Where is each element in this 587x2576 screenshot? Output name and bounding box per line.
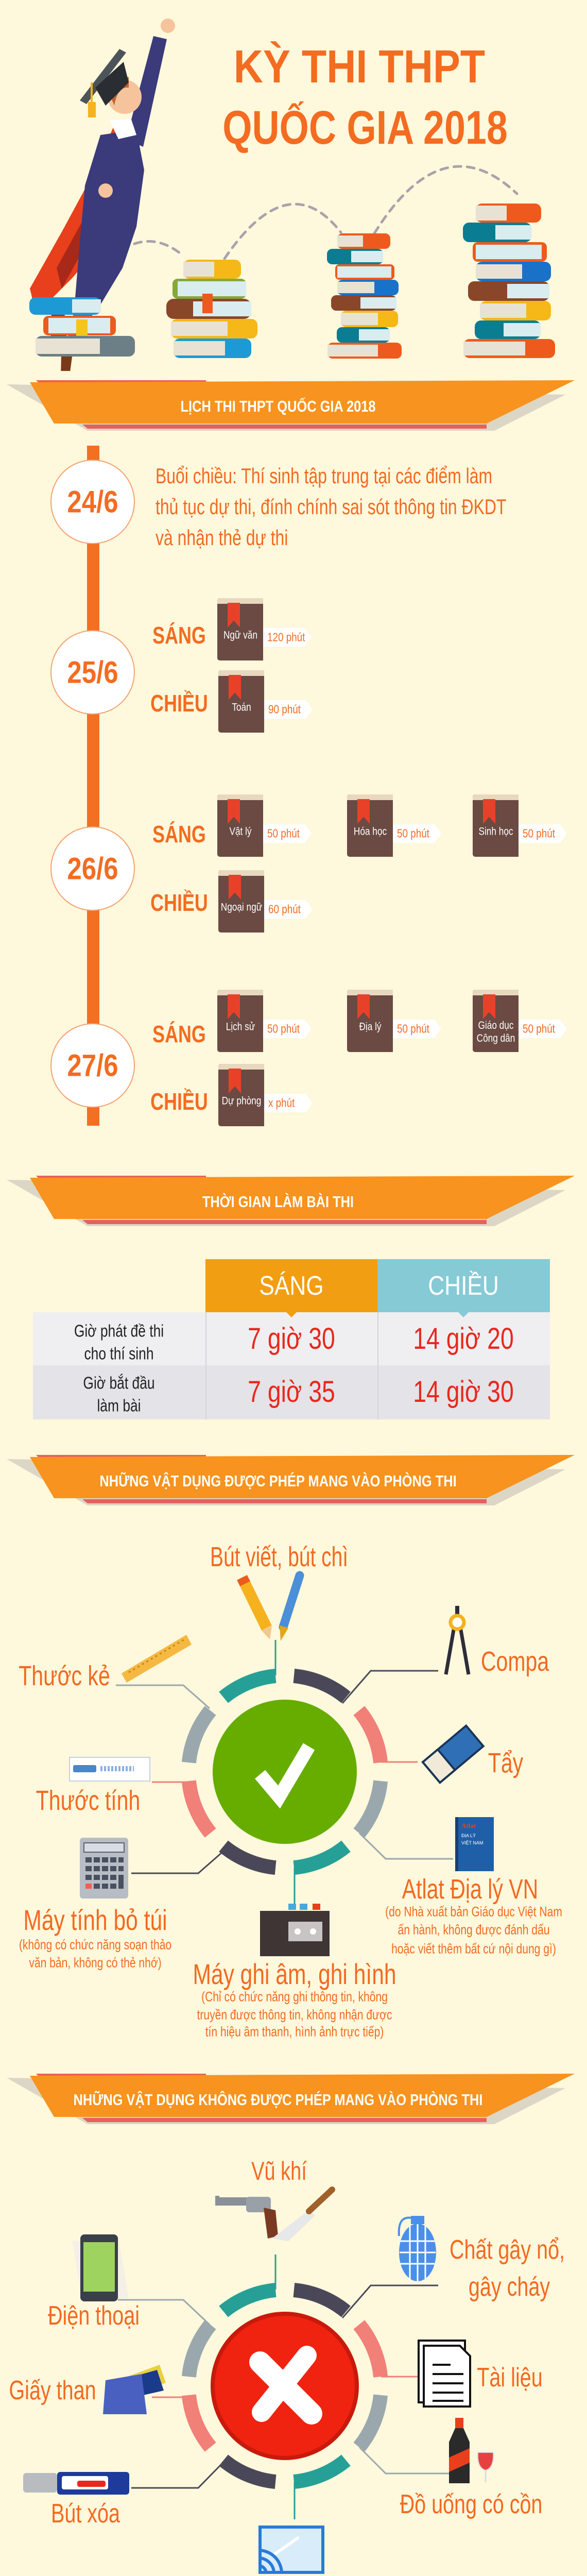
subject: ngữ văn: Ngữ văn: [223, 629, 257, 641]
label: sáng 25/6: SÁNG: [152, 622, 206, 649]
label: atlat: (do Nhà xuất bản Giáo dục Việt Nam: [385, 1904, 562, 1920]
header illustration: student and book stacks: [29, 19, 555, 371]
header: chiều: CHIỀU: [428, 1271, 499, 1301]
header: sáng: SÁNG: [259, 1271, 324, 1301]
label: thước tính: Thước tính: [36, 1785, 140, 1816]
label: sáng 27/6: SÁNG: [152, 1021, 206, 1047]
ring segments: [189, 1676, 381, 1868]
subject: ngữ văn: 120 phút: [267, 631, 305, 644]
label: đồ uống có cồn: Đồ uống có cồn: [400, 2489, 542, 2519]
title: QUỐC GIA 2018: [222, 101, 508, 154]
subject: giáo dục công dân: 50 phút: [523, 1022, 555, 1036]
connector lines: [118, 2255, 453, 2519]
header: sáng: [205, 1259, 377, 1312]
date 25/6: [50, 630, 135, 715]
label: chất gây nổ: [450, 2235, 565, 2302]
label: máy tính bỏ túi: Máy tính bỏ túi: [23, 1904, 167, 1936]
icon: carbon paper: [103, 2365, 166, 2414]
icon: bottle and glass: [449, 2418, 493, 2483]
banner: thời gian làm bài: THỜI GIAN LÀM BÀI THI: [202, 1193, 354, 1211]
row 2: Giờ bắt đầu: [83, 1374, 155, 1392]
label: máy tính bỏ túi: (không có chức năng soạn thảo: [19, 1937, 171, 1953]
ring segments: [189, 2290, 381, 2482]
date 25/6: 25/6: [67, 655, 118, 689]
icon: atlas book: ĐỊA LÝ: [461, 1833, 476, 1838]
date 24/6: [50, 460, 135, 544]
row 1: Giờ phát đề thi: [74, 1321, 164, 1341]
subject: giáo dục công dân: Giáo dục: [478, 1020, 513, 1031]
icon: atlas book: [455, 1817, 494, 1871]
icon: slide rule calculator: [70, 1757, 150, 1781]
banner: allowed items: NHỮNG VẬT DỤNG ĐƯỢC PHÉP MANG VÀO PHÒNG THI: [99, 1472, 457, 1490]
label: atlat: Atlat Địa lý VN: [402, 1874, 538, 1905]
label: chất gây nổ: Chất gây nổ,: [450, 2235, 565, 2265]
row 1: 14 giờ 20: [413, 1322, 514, 1355]
label: máy ghi âm: tín hiệu âm thanh, hình ảnh trực tiếp): [205, 2024, 384, 2039]
row 2: 7 giờ 35: [248, 1375, 335, 1409]
label: máy ghi âm: Máy ghi âm, ghi hình: [193, 1958, 396, 1990]
label: bút xóa: Bút xóa: [51, 2499, 120, 2529]
label: vũ khí: Vũ khí: [251, 2157, 307, 2185]
subject: vật lý: 50 phút: [267, 826, 300, 840]
subject: địa lý: Địa lý: [359, 1021, 381, 1032]
icon: calculator: [80, 1838, 128, 1899]
red X circle: [213, 2314, 357, 2458]
date 27/6: 27/6: [67, 1048, 118, 1083]
label: chiều 25/6: CHIỀU: [150, 690, 208, 717]
label: bút viết, bút chì: Bút viết, bút chì: [210, 1541, 348, 1572]
label: atlat: [385, 1874, 562, 1957]
title: [222, 41, 508, 154]
icon: compass: [446, 1606, 469, 1674]
icon: ruler: [122, 1635, 192, 1683]
banner: allowed items: [7, 1455, 575, 1505]
label: máy ghi âm: [193, 1958, 396, 2039]
subject: hóa học: Hóa học: [353, 825, 387, 837]
date 26/6: 26/6: [67, 851, 118, 886]
text: 24/6 afternoon description: [156, 464, 506, 550]
label: chiều 26/6: CHIỀU: [150, 889, 208, 916]
subject: sinh học: 50 phút: [523, 826, 555, 840]
subject: dự phòng: x phút: [268, 1096, 295, 1110]
book stack 2: [166, 260, 257, 358]
connector lines: [116, 1640, 453, 1904]
subject: ngoại ngữ: 60 phút: [268, 903, 301, 916]
subject: địa lý: [347, 990, 441, 1052]
banner: thời gian làm bài: [7, 1176, 575, 1226]
icon: recorder: [260, 1904, 330, 1956]
subject: ngữ văn: [217, 598, 312, 660]
icon: grenade: [399, 2216, 436, 2281]
icon: pencil and pen: [242, 1575, 300, 1641]
row 1: [33, 1312, 550, 1365]
banner: prohibited items: [7, 2074, 575, 2124]
subject: lịch sử: [217, 990, 312, 1052]
label: máy tính bỏ túi: văn bản, không có thẻ nhớ): [29, 1955, 162, 1970]
date 27/6: [50, 1023, 135, 1108]
label: atlat: ấn hành, không được đánh dấu: [398, 1922, 549, 1937]
book stack 4: [463, 204, 555, 358]
row 2: [33, 1365, 550, 1419]
text: 24/6 afternoon description: và nhận thẻ dự thi: [156, 526, 288, 550]
timeline line: [87, 446, 99, 1126]
subject: hóa học: [347, 794, 441, 857]
icon: documents: [419, 2341, 470, 2406]
book stack 3: [327, 233, 402, 359]
dashed jump arcs: [86, 166, 517, 289]
label: tài liệu: Tài liệu: [477, 2363, 543, 2393]
banner: prohibited items: NHỮNG VẬT DỤNG KHÔNG ĐƯỢC PHÉP MANG VÀO PHÒNG THI: [74, 2091, 482, 2109]
icon: phone: [72, 2234, 129, 2301]
icon: gun and knife: [215, 2190, 332, 2241]
label: atlat: hoặc viết thêm bất cứ nội dung gì): [391, 1941, 556, 1957]
banner: lịch thi: [7, 380, 575, 431]
header: chiều: [377, 1259, 550, 1312]
subject: hóa học: 50 phút: [397, 826, 429, 840]
label: giấy than: Giấy than: [9, 2376, 96, 2405]
label: điện thoại: Điện thoại: [48, 2301, 140, 2331]
book stack 1: [29, 297, 135, 357]
banner: lịch thi: LỊCH THI THPT QUỐC GIA 2018: [181, 397, 375, 415]
green check circle: [213, 1700, 357, 1844]
date 26/6: [50, 826, 135, 911]
label: tẩy: Tẩy: [488, 1748, 523, 1778]
table: exam times: [33, 1259, 550, 1419]
subject: lịch sử: Lịch sử: [226, 1021, 255, 1032]
label: sáng 26/6: SÁNG: [152, 821, 206, 848]
subject: địa lý: 50 phút: [397, 1022, 429, 1036]
student figure: [30, 19, 175, 376]
icon: correction pen: [23, 2472, 129, 2495]
label: chiều 27/6: CHIỀU: [150, 1088, 208, 1115]
subject: lịch sử: 50 phút: [267, 1022, 300, 1036]
subject: giáo dục công dân: Công dân: [476, 1032, 515, 1044]
subject: sinh học: Sinh học: [478, 825, 513, 837]
row 1: cho thí sinh: [84, 1344, 154, 1363]
subject: toán: Toán: [232, 701, 251, 713]
subject: ngoại ngữ: [218, 870, 313, 933]
text: 24/6 afternoon description: Buổi chiều: Thí sinh tập trung tại các điểm làm: [156, 464, 492, 488]
subject: vật lý: [217, 794, 312, 857]
date 24/6: 24/6: [67, 484, 118, 519]
subject: toán: [218, 670, 313, 733]
icon: transmitting device: [258, 2527, 323, 2573]
row 1: 7 giờ 30: [248, 1322, 335, 1355]
label: compa: Compa: [481, 1646, 549, 1677]
label: máy tính bỏ túi: [19, 1904, 171, 1970]
subject: toán: 90 phút: [268, 703, 301, 716]
label: thước kẻ: Thước kẻ: [19, 1660, 110, 1691]
subject: sinh học: [473, 794, 567, 857]
subject: vật lý: Vật lý: [229, 825, 251, 837]
icon: atlas book: Atlat: [461, 1822, 476, 1829]
row 2: 14 giờ 30: [413, 1375, 514, 1409]
icon: atlas book: VIỆT NAM: [461, 1840, 483, 1845]
label: chất gây nổ: gây cháy: [469, 2272, 550, 2302]
label: máy ghi âm: truyền được thông tin, không nhận được: [197, 2007, 392, 2023]
subject: ngoại ngữ: Ngoại ngữ: [220, 901, 262, 913]
subject: dự phòng: Dự phòng: [221, 1095, 261, 1107]
subject: giáo dục công dân: [473, 990, 567, 1052]
label: máy ghi âm: (Chỉ có chức năng ghi thông tin, không: [201, 1989, 388, 2004]
subject: dự phòng: [218, 1064, 313, 1126]
text: 24/6 afternoon description: thủ tục dự thi, đính chính sai sót thông tin ĐKDT: [156, 495, 506, 519]
icon: eraser: [423, 1726, 484, 1783]
diagram: prohibited items: [23, 2187, 494, 2574]
row 2: làm bài: [97, 1396, 141, 1415]
title: KỲ THI THPT: [234, 41, 485, 93]
diagram: allowed items: [69, 1571, 494, 1956]
